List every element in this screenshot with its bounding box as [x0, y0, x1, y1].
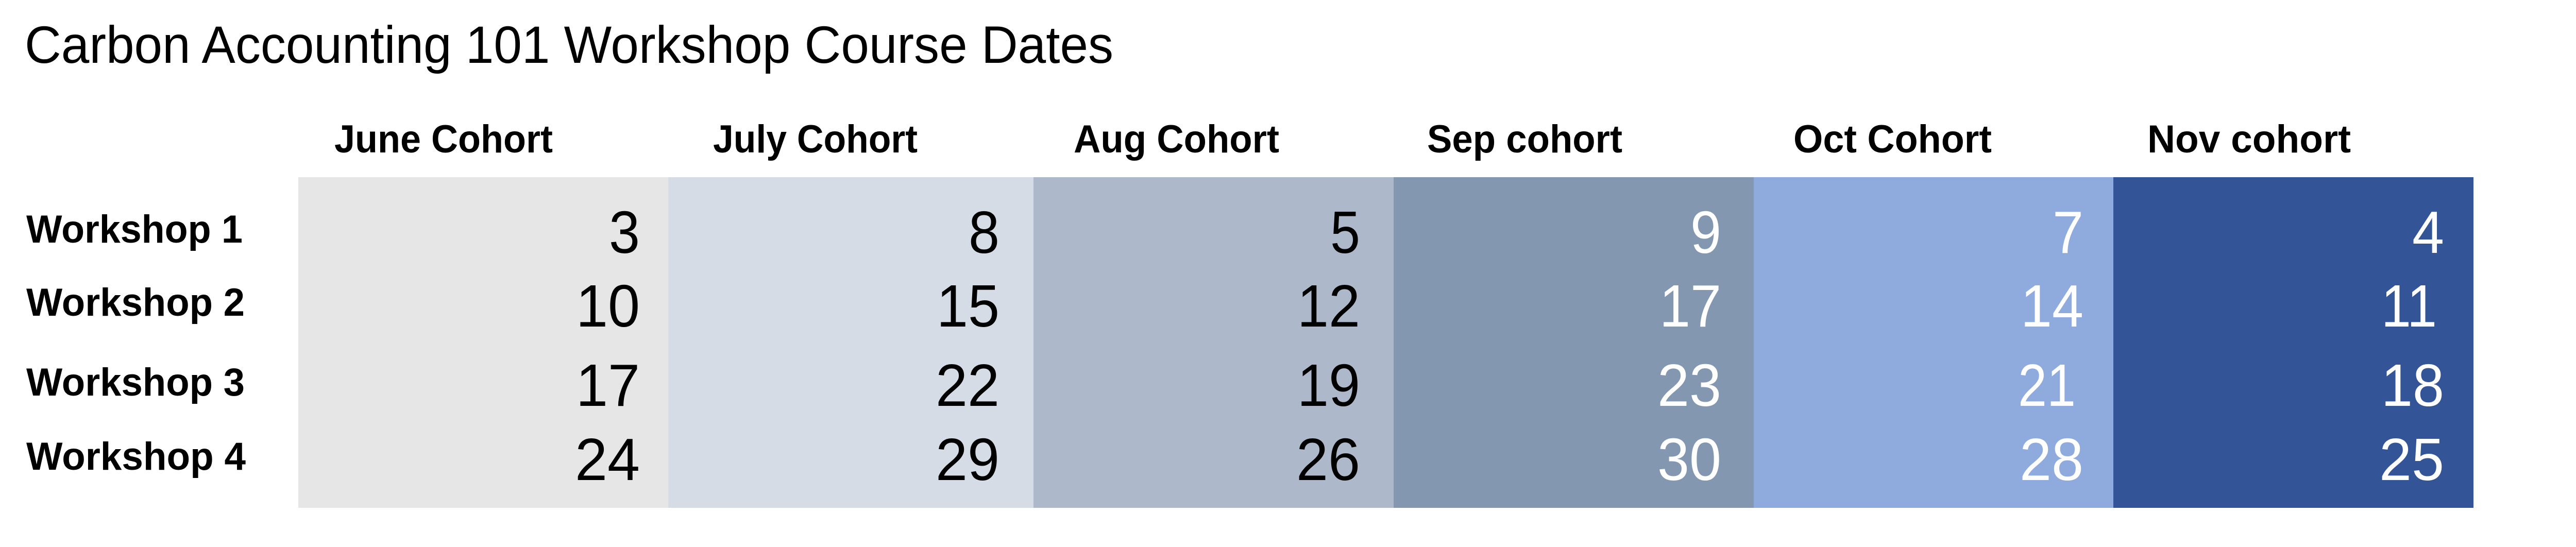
column heading: Oct Cohort: [1793, 117, 1992, 161]
dates: 5: [1330, 199, 1360, 266]
row labels: [26, 208, 246, 478]
dates: 11: [2381, 272, 2437, 339]
column background: [1033, 177, 1394, 508]
dates: 14: [2021, 272, 2083, 339]
dates: 22: [936, 352, 999, 419]
title: Carbon Accounting 101 Workshop Course Dates: [25, 15, 1113, 74]
label: workshop 1: Workshop 1: [26, 208, 243, 251]
dates: 29: [936, 426, 999, 493]
column background: [668, 177, 1033, 508]
dates: [575, 199, 640, 493]
column heading: Nov cohort: [2147, 117, 2351, 161]
dates: 30: [1657, 426, 1721, 493]
column: Aug cohort: [1033, 117, 1394, 508]
dates: 12: [1297, 272, 1360, 339]
dates: 7: [2053, 199, 2083, 266]
dates: [1657, 199, 1721, 493]
dates: [2379, 199, 2444, 493]
column heading: Sep cohort: [1427, 117, 1622, 161]
dates: 9: [1690, 199, 1721, 266]
dates: 24: [575, 426, 640, 493]
column: July cohort: [668, 117, 1033, 508]
dates: 17: [576, 352, 640, 419]
column heading: Aug Cohort: [1074, 117, 1279, 161]
dates: 3: [609, 199, 640, 266]
column: Oct cohort: [1754, 117, 2113, 508]
column heading: June Cohort: [334, 117, 553, 161]
dates: 18: [2381, 352, 2444, 419]
column background: [2113, 177, 2473, 508]
column: June cohort: [298, 117, 668, 508]
dates: 25: [2379, 426, 2444, 493]
dates: 17: [1659, 272, 1721, 339]
dates: [936, 199, 999, 493]
column background: [298, 177, 668, 508]
column background: [1754, 177, 2113, 508]
label: workshop 3: Workshop 3: [26, 361, 245, 404]
dates: 4: [2412, 199, 2444, 266]
dates: 10: [576, 272, 640, 339]
dates: 21: [2018, 352, 2076, 419]
dates: 8: [969, 199, 999, 266]
dates: 19: [1297, 352, 1360, 419]
dates: 26: [1296, 426, 1360, 493]
column: Nov cohort: [2113, 117, 2473, 508]
label: workshop 2: Workshop 2: [26, 281, 245, 324]
dates: 15: [937, 272, 999, 339]
dates: 28: [2020, 426, 2083, 493]
column background: [1394, 177, 1754, 508]
column heading: July Cohort: [713, 117, 918, 161]
dates: [2018, 199, 2083, 493]
dates: [1296, 199, 1360, 493]
column: Sep cohort: [1394, 117, 1754, 508]
label: workshop 4: Workshop 4: [26, 435, 246, 478]
dates: 23: [1657, 352, 1721, 419]
